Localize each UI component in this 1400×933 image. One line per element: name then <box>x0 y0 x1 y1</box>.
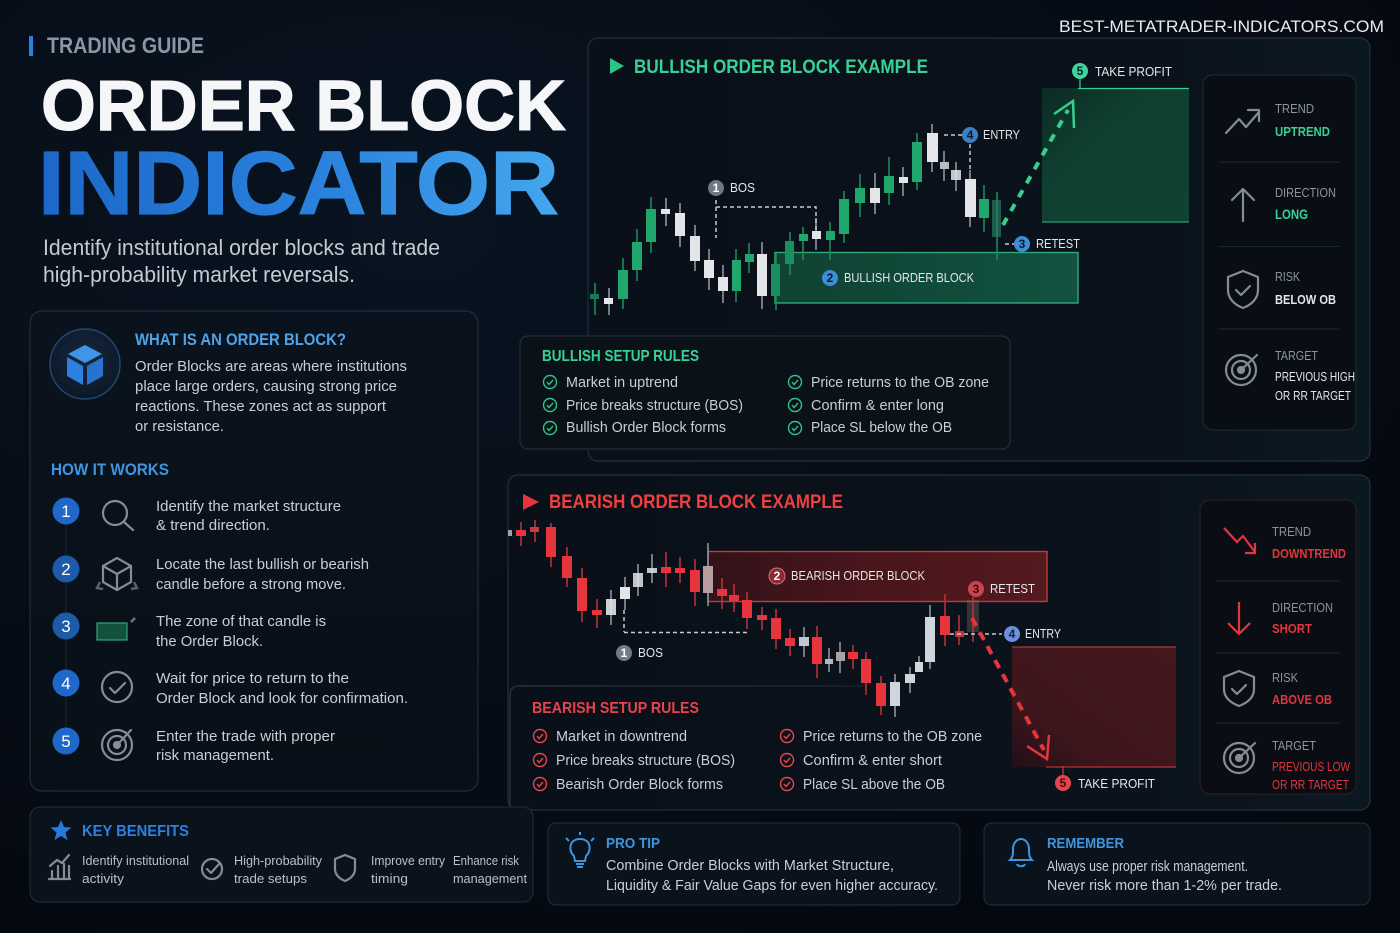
panel: bullish trade summary: UPTREND <box>1275 124 1330 139</box>
step 4: 4 <box>61 674 71 693</box>
panel: bullish trade summary: TARGET <box>1275 348 1318 363</box>
label: take profit: 5 <box>1060 776 1067 790</box>
bearish order block zone <box>708 552 1047 602</box>
panel: bullish trade summary: OR RR TARGET <box>1275 389 1351 403</box>
definition text: Order Blocks are areas where institutions <box>135 359 407 375</box>
label: entry: ENTRY <box>1025 626 1061 641</box>
label: retest: RETEST <box>990 581 1035 596</box>
panel: bullish setup rules: Price returns to the OB zone <box>811 375 989 391</box>
panel: bullish trade summary: TREND <box>1275 101 1314 116</box>
definition text: or resistance. <box>135 419 224 435</box>
panel: bearish trade summary: DOWNTREND <box>1272 546 1346 561</box>
panel: bearish trade summary: PREVIOUS LOW <box>1272 760 1350 774</box>
panel: remember <box>984 823 1370 905</box>
label: bullish order block: BULLISH ORDER BLOCK <box>844 270 974 285</box>
panel: bullish setup rules: Place SL below the OB <box>811 420 952 436</box>
benefit: improve entry timing: Improve entry <box>371 853 445 868</box>
step 5: Enter the trade with proper <box>156 729 335 745</box>
pro tip text <box>606 858 938 894</box>
panel: bearish setup rules: Place SL above the OB <box>803 777 945 793</box>
label: retest: 3 <box>1019 237 1026 251</box>
panel: bearish setup rules: Confirm & enter short <box>803 753 942 769</box>
subtitle <box>43 235 440 287</box>
step 3: 3 <box>61 617 71 636</box>
step 1 <box>52 498 341 534</box>
step 3 <box>52 612 326 650</box>
benefit: improve entry timing: timing <box>371 871 408 886</box>
panel: bearish order block example <box>508 475 1370 810</box>
benefit: institutional activity: activity <box>82 871 125 886</box>
icon: light bulb <box>566 832 594 867</box>
target line <box>1078 79 1189 88</box>
label: entry <box>962 127 1020 143</box>
step 5 <box>52 728 335 764</box>
panel: bearish trade summary: OR RR TARGET <box>1272 778 1349 792</box>
site watermark: BEST-METATRADER-INDICATORS.COM <box>1059 18 1384 36</box>
label: BOS: 1 <box>713 181 720 195</box>
step 3: the Order Block. <box>156 634 263 650</box>
panel: bullish trade summary: LONG <box>1275 207 1308 222</box>
label: BOS: 1 <box>621 646 628 660</box>
step 1: Identify the market structure <box>156 499 341 515</box>
step 1: & trend direction. <box>156 518 270 534</box>
panel: bullish trade summary: PREVIOUS HIGH <box>1275 370 1355 384</box>
bullish heading: BULLISH ORDER BLOCK EXAMPLE <box>634 56 928 78</box>
BOS dotted guide <box>624 610 748 632</box>
heading: what is an order block: WHAT IS AN ORDER BLOCK? <box>135 331 346 349</box>
panel: bearish trade summary: ABOVE OB <box>1272 692 1332 707</box>
step 3: The zone of that candle is <box>156 614 326 630</box>
pro tip text: Combine Order Blocks with Market Structure, <box>606 858 894 874</box>
label: retest <box>968 581 1035 597</box>
panel: bearish setup rules: BEARISH SETUP RULES <box>532 700 699 717</box>
icon: target <box>1224 743 1255 773</box>
icon: shield check <box>1228 271 1258 308</box>
step 2: candle before a strong move. <box>156 577 346 593</box>
icon: down arrow <box>1228 602 1250 634</box>
label: take profit: TAKE PROFIT <box>1095 64 1172 79</box>
pro tip heading: PRO TIP <box>606 836 660 852</box>
header: guide label, title and subtitle <box>29 33 566 287</box>
remember heading: REMEMBER <box>1047 836 1124 852</box>
label: entry <box>1004 626 1061 642</box>
panel: bullish trade summary: BELOW OB <box>1275 292 1336 307</box>
heading: how it works: HOW IT WORKS <box>51 461 169 479</box>
panel: bullish setup rules <box>520 336 1010 449</box>
icon: shield <box>1224 671 1254 706</box>
take profit zone <box>1042 88 1189 222</box>
key benefits heading: KEY BENEFITS <box>82 823 189 840</box>
step 2: Locate the last bullish or bearish <box>156 557 369 573</box>
entry guide <box>950 633 1002 635</box>
arrow: dashed trade path to target <box>972 618 1049 759</box>
title line: indicator: INDICATOR <box>38 134 559 234</box>
remember text <box>1047 859 1282 894</box>
definition text: reactions. These zones act as support <box>135 399 386 415</box>
panel: bullish setup rules: Confirm & enter long <box>811 398 944 414</box>
step 4 <box>52 670 408 707</box>
panel: bearish trade summary: SHORT <box>1272 621 1312 636</box>
entry and retest guides <box>944 135 1014 244</box>
BOS dotted guide <box>716 200 816 238</box>
benefit: high probability setups <box>202 853 322 886</box>
label: retest: RETEST <box>1036 236 1080 251</box>
panel: bullish setup rules: Price breaks structure (BOS) <box>566 398 743 414</box>
panel: bearish trade summary <box>1200 500 1356 794</box>
panel: bearish setup rules: Bearish Order Block forms <box>556 777 723 793</box>
panel: bullish setup rules: Market in uptrend <box>566 375 678 391</box>
label: take profit <box>1072 63 1172 79</box>
panel: bullish setup rules: BULLISH SETUP RULES <box>542 348 699 365</box>
panel: bearish setup rules <box>510 686 982 808</box>
step 2: 2 <box>61 560 71 579</box>
benefit: risk management: Enhance risk <box>453 853 519 868</box>
benefit: institutional activity <box>49 853 189 886</box>
label: BOS: BOS <box>730 180 755 195</box>
subtitle: high-probability market reversals. <box>43 262 355 287</box>
panel: bullish order block example <box>520 38 1370 461</box>
icon: star <box>50 820 72 840</box>
icon: blue cube <box>50 329 120 399</box>
label: entry: ENTRY <box>983 127 1020 142</box>
panel: bullish setup rules: Bullish Order Block forms <box>566 420 726 436</box>
bearish candlestick chart <box>508 520 979 717</box>
benefit: institutional activity: Identify institutional <box>82 853 189 868</box>
definition text <box>135 359 407 435</box>
label: BOS <box>708 180 755 196</box>
label: retest <box>1014 236 1080 252</box>
panel: bearish trade summary: TARGET <box>1272 738 1316 753</box>
label: take profit <box>1055 775 1155 791</box>
step 2 <box>52 556 369 593</box>
title line: order block: ORDER BLOCK <box>41 67 566 146</box>
label: take profit: TAKE PROFIT <box>1078 776 1155 791</box>
panel: bearish setup rules: Market in downtrend <box>556 729 687 745</box>
benefit: high probability setups: trade setups <box>234 871 308 886</box>
label: BOS: BOS <box>638 645 663 660</box>
benefit: risk management <box>453 853 527 886</box>
step 5: risk management. <box>156 748 274 764</box>
benefit: risk management: management <box>453 871 527 886</box>
trading guide eyebrow: TRADING GUIDE <box>47 33 204 58</box>
step 4: Wait for price to return to the <box>156 671 349 687</box>
label: BOS <box>616 645 663 661</box>
panel: bearish setup rules: Price breaks structure (BOS) <box>556 753 735 769</box>
panel: bearish trade summary: RISK <box>1272 670 1298 685</box>
remember text: Always use proper risk management. <box>1047 859 1248 875</box>
definition text: place large orders, causing strong price <box>135 379 397 395</box>
icon: uptrend <box>1226 110 1259 133</box>
subtitle: Identify institutional order blocks and trade <box>43 235 440 260</box>
icon: target <box>1226 355 1257 385</box>
icon: downtrend <box>1224 528 1255 553</box>
arrow: dashed trade path to target <box>1003 101 1074 225</box>
label: entry: 4 <box>967 128 974 142</box>
panel: bearish trade summary: TREND <box>1272 524 1311 539</box>
label: bearish order block: 2 <box>774 569 781 583</box>
panel: bullish trade summary <box>1203 75 1356 430</box>
label: retest: 3 <box>973 582 980 596</box>
icon: up arrow <box>1232 189 1254 221</box>
panel: what is an order block and how it works <box>30 311 478 791</box>
benefit: high probability setups: High-probability <box>234 853 322 868</box>
bullish candlestick chart <box>590 124 1001 315</box>
remember text: Never risk more than 1-2% per trade. <box>1047 878 1282 894</box>
step 4: Order Block and look for confirmation. <box>156 691 408 707</box>
label: bearish order block: BEARISH ORDER BLOCK <box>791 568 925 583</box>
pro tip text: Liquidity & Fair Value Gaps for even higher accuracy. <box>606 878 938 894</box>
panel: pro tip <box>548 823 960 905</box>
step connector line <box>65 524 67 728</box>
panel: bearish trade summary: DIRECTION <box>1272 600 1333 615</box>
step 5: 5 <box>61 732 71 751</box>
panel: bearish setup rules: Price returns to the OB zone <box>803 729 982 745</box>
bearish heading: BEARISH ORDER BLOCK EXAMPLE <box>549 491 843 513</box>
panel: bullish trade summary: RISK <box>1275 269 1300 284</box>
step 1: 1 <box>61 502 71 521</box>
icon: bell <box>1010 839 1032 866</box>
label: bullish order block: 2 <box>827 271 834 285</box>
benefit: improve entry timing <box>335 853 445 886</box>
panel: key benefits <box>30 807 533 902</box>
label: entry: 4 <box>1009 627 1016 641</box>
label: take profit: 5 <box>1077 64 1084 78</box>
take profit zone <box>1012 647 1176 767</box>
panel: bullish trade summary: DIRECTION <box>1275 185 1336 200</box>
bullish order block zone <box>775 252 1078 303</box>
